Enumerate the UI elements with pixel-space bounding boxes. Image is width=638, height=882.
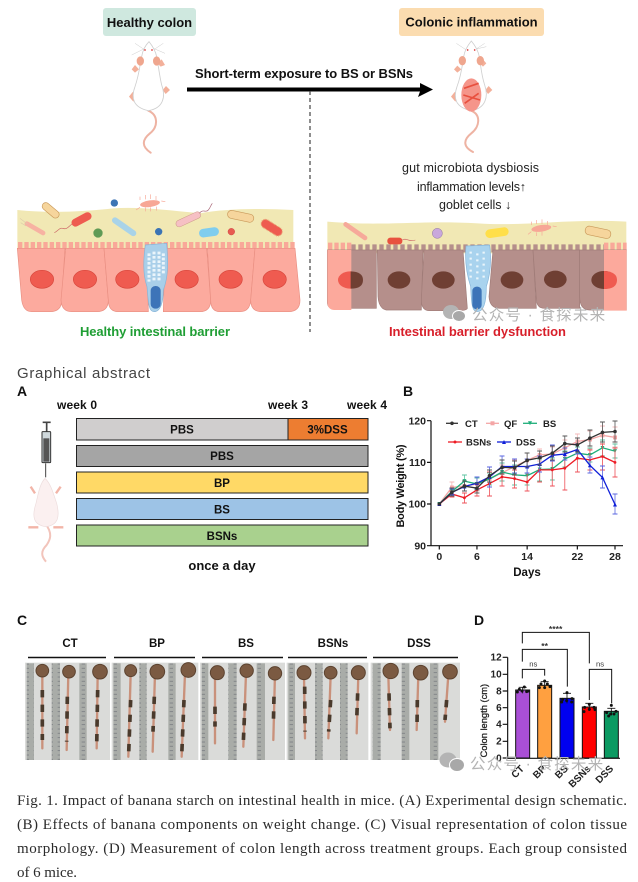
group labels: CT bbox=[62, 638, 78, 650]
label: Intestinal barrier dysfunction: Intestinal barrier dysfunction bbox=[389, 324, 566, 339]
goblet cell bbox=[466, 245, 491, 312]
bar: PBS bbox=[76, 446, 368, 466]
y tick labels: 6 bbox=[496, 703, 502, 714]
significance brackets bbox=[522, 632, 612, 703]
text: inflammation effects: inflammation levels↑ bbox=[417, 180, 526, 194]
bar labels: PBS bbox=[170, 424, 194, 436]
watermark: bottom bbox=[440, 752, 604, 773]
x tick labels: 28 bbox=[609, 551, 621, 563]
epithelial cells bbox=[17, 248, 300, 312]
x tick labels: 14 bbox=[521, 551, 533, 563]
panel A: experimental design bbox=[17, 383, 387, 573]
label: Healthy intestinal barrier: Healthy intestinal barrier bbox=[80, 324, 230, 339]
bacteria bbox=[20, 194, 284, 238]
significance labels: **** bbox=[549, 624, 563, 634]
panel letter C: C bbox=[17, 612, 27, 628]
x labels: BP bbox=[531, 763, 549, 781]
label: Colonic inflammation bbox=[399, 8, 544, 36]
bar: BSNs bbox=[76, 525, 368, 546]
microvilli bbox=[18, 234, 295, 258]
bar labels bbox=[170, 424, 348, 543]
x tick labels: 6 bbox=[474, 551, 480, 563]
y tick labels: 100 bbox=[408, 499, 426, 511]
group labels: DSS bbox=[407, 638, 431, 650]
axis title: Body Weight: Body Weight (%) bbox=[395, 444, 407, 528]
group labels: BSNs bbox=[318, 638, 348, 650]
text: inflammation effects: gut microbiota dysbiosis bbox=[402, 161, 539, 175]
figure caption: (B) Effects of banana components on weight change. (C) Visual representation of colon tissue bbox=[17, 817, 627, 833]
damaged cells bbox=[327, 250, 626, 311]
label: once a day: once a day bbox=[188, 558, 256, 573]
photo backgrounds bbox=[25, 663, 460, 760]
y tick labels: 0 bbox=[496, 753, 502, 764]
panel: healthy intestinal barrier bbox=[17, 194, 300, 312]
y tick labels bbox=[491, 653, 502, 764]
y tick labels: 120 bbox=[408, 416, 426, 428]
week labels: week 0 bbox=[56, 398, 97, 412]
bar labels: 3%DSS bbox=[307, 424, 348, 436]
photographs bbox=[25, 663, 460, 760]
x tick labels: 0 bbox=[436, 551, 442, 563]
axes bbox=[503, 657, 620, 758]
y tick labels: 12 bbox=[491, 653, 502, 664]
watermark: bottom: 公众号 · 食探未来 bbox=[470, 755, 604, 773]
y tick labels: 90 bbox=[414, 540, 426, 552]
bacteria bbox=[342, 219, 612, 244]
watermark: top: 公众号 · 食探未来 bbox=[472, 306, 606, 324]
series CT bbox=[439, 421, 615, 504]
bars bbox=[516, 685, 618, 758]
divider: dashed bbox=[309, 91, 311, 332]
heading: Graphical abstract: Graphical abstract bbox=[17, 365, 151, 382]
panel letter D: D bbox=[474, 612, 484, 628]
bar: BP bbox=[76, 472, 368, 493]
legend: BS bbox=[543, 419, 556, 430]
y tick labels: 10 bbox=[491, 670, 502, 681]
bar labels: BSNs bbox=[207, 531, 237, 543]
group labels: BS bbox=[238, 638, 254, 650]
label: Healthy colon: Healthy colon bbox=[107, 15, 192, 30]
significance labels: ns bbox=[529, 660, 538, 669]
data points bbox=[516, 679, 617, 717]
mucus layer bbox=[327, 221, 626, 253]
week labels bbox=[56, 398, 387, 412]
series BSNs bbox=[439, 444, 615, 504]
panel D: colon length bar chart bbox=[474, 612, 620, 790]
panel letter B: B bbox=[403, 383, 413, 399]
series BS bbox=[439, 440, 615, 504]
figure caption: morphology. (D) Measurement of colon length across treatment groups. Each group consisted bbox=[17, 841, 627, 857]
label: short-term exposure: Short-term exposure to BS or BSNs bbox=[195, 66, 413, 81]
axes bbox=[427, 421, 623, 550]
x labels: DSS bbox=[594, 763, 616, 786]
group labels: BP bbox=[149, 638, 165, 650]
x labels: CT bbox=[510, 764, 527, 781]
bar: PBS then 3%DSS bbox=[76, 418, 368, 440]
icon: inflamed mouse bbox=[451, 41, 492, 152]
text: inflammation effects: goblet cells ↓ bbox=[439, 198, 511, 212]
arrow: exposure bbox=[187, 83, 433, 97]
legend: QF bbox=[504, 419, 517, 430]
group rules bbox=[28, 656, 458, 658]
week labels: week 4 bbox=[346, 398, 387, 412]
x labels bbox=[510, 763, 616, 790]
panel: intestinal barrier dysfunction bbox=[327, 219, 627, 312]
error bars bbox=[519, 682, 615, 715]
bar: BS bbox=[76, 498, 368, 520]
x labels: BS bbox=[553, 763, 571, 781]
text: inflammation effects bbox=[402, 161, 539, 212]
y tick labels bbox=[408, 416, 426, 552]
series QF bbox=[439, 426, 615, 504]
y tick labels: 4 bbox=[496, 720, 502, 731]
label: Colonic inflammation: Colonic inflammation bbox=[405, 14, 538, 30]
icon: syringe and mouse bbox=[28, 422, 63, 562]
panel B: body weight line chart bbox=[395, 383, 623, 579]
microvilli bbox=[351, 236, 604, 260]
figure caption bbox=[17, 793, 627, 881]
significance labels: ns bbox=[596, 660, 604, 669]
x tick labels: 22 bbox=[572, 551, 583, 563]
legend bbox=[446, 419, 556, 448]
panel C: colon morphology photographs bbox=[17, 612, 460, 760]
icon: healthy mouse bbox=[129, 42, 170, 153]
bar labels: BP bbox=[214, 478, 230, 490]
bar labels: BS bbox=[214, 504, 230, 516]
healthy edges bbox=[327, 250, 627, 311]
significance labels bbox=[529, 624, 604, 669]
series DSS bbox=[439, 444, 615, 514]
goblet cell bbox=[144, 243, 168, 312]
legend: DSS bbox=[516, 438, 536, 448]
legend: BSNs bbox=[466, 438, 491, 448]
week labels: week 3 bbox=[267, 398, 308, 412]
figure caption: of 6 mice. bbox=[17, 865, 77, 881]
figure caption: Fig. 1. Impact of banana starch on intestinal health in mice. (A) Experimental design schematic. bbox=[17, 793, 627, 809]
y tick labels: 8 bbox=[496, 686, 502, 697]
legend: CT bbox=[465, 419, 478, 430]
x labels: BSNs bbox=[567, 763, 594, 790]
label: Healthy colon bbox=[103, 8, 196, 36]
group labels bbox=[62, 638, 431, 650]
axis title: Colon length: Colon length (cm) bbox=[479, 684, 489, 757]
y tick labels: 110 bbox=[409, 457, 426, 469]
nuclei bbox=[338, 271, 617, 289]
faecal pellets bbox=[42, 687, 447, 757]
y tick labels: 2 bbox=[496, 737, 502, 748]
mucus layer bbox=[17, 208, 293, 250]
nuclei bbox=[30, 270, 286, 288]
bar labels: PBS bbox=[210, 451, 234, 463]
colon tails bbox=[42, 673, 448, 757]
x tick labels bbox=[436, 551, 621, 563]
coiled proximal colon bbox=[36, 663, 457, 680]
panel letter A: A bbox=[17, 383, 27, 399]
significance labels: ** bbox=[541, 641, 549, 651]
rulers bbox=[27, 663, 438, 760]
axis title: Days: Days bbox=[513, 567, 541, 579]
healthy microvilli at edges bbox=[328, 235, 627, 259]
